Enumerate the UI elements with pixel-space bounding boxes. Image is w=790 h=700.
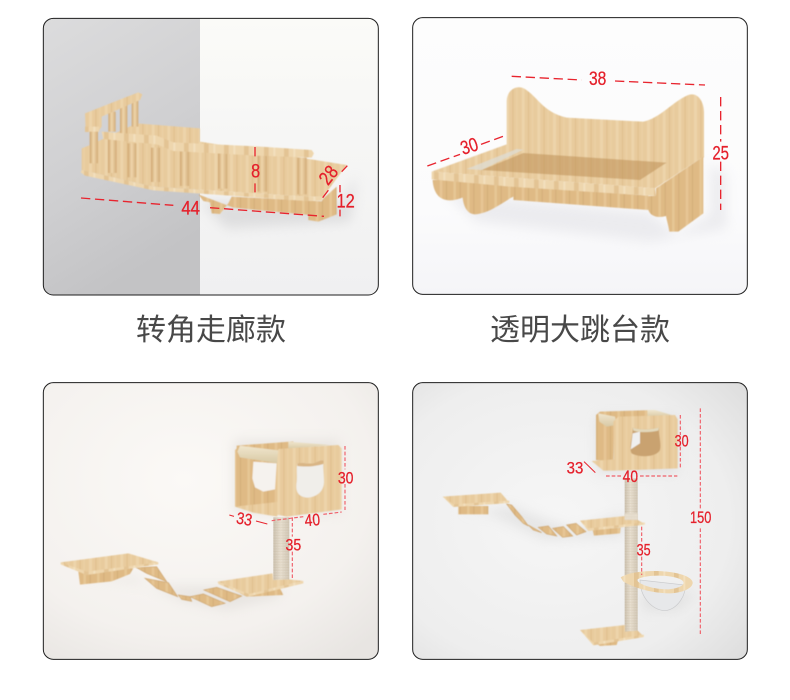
label 44: 44 [181, 198, 200, 219]
label 30: 30 [675, 431, 689, 450]
label 30: 30 [458, 134, 481, 160]
jump platform illustration [432, 87, 704, 232]
label 40: 40 [623, 467, 638, 486]
soft wall shadow [443, 162, 727, 242]
scratching post [273, 517, 289, 581]
wall background [43, 18, 378, 295]
label 33: 33 [235, 508, 254, 530]
dimension lines: cube house [229, 446, 345, 579]
scratching post [625, 478, 638, 632]
cube house [592, 410, 678, 471]
cube house [235, 441, 342, 517]
hammock with glass bowl [621, 571, 693, 611]
label 38: 38 [589, 69, 606, 90]
panel: tall tower with hammock [413, 383, 747, 659]
dimension lines: corner shelf [81, 147, 347, 216]
label 30: 30 [338, 469, 353, 488]
rope bridge [507, 504, 586, 537]
label 35: 35 [285, 535, 301, 554]
rope bridge [137, 567, 242, 607]
label 8: 8 [251, 161, 260, 182]
caption: transparent jump platform: 透明大跳台款 [490, 314, 670, 347]
dimension lines: tower [584, 408, 700, 635]
label 25: 25 [712, 144, 729, 165]
label 33: 33 [567, 459, 583, 478]
label 28: 28 [315, 162, 343, 189]
upper left platform [443, 493, 509, 514]
panel border [413, 383, 747, 659]
bottom platform [580, 625, 644, 646]
label 12: 12 [336, 192, 355, 213]
wall background [413, 383, 747, 659]
soft shadows [458, 417, 697, 610]
lower platform [218, 573, 303, 597]
wall background [43, 383, 378, 659]
corner shelf illustration [81, 92, 347, 222]
soft shadows [80, 440, 340, 610]
label 150: 150 [690, 508, 711, 527]
wall background [413, 18, 747, 294]
label 40: 40 [304, 510, 321, 530]
upper left platform [61, 553, 158, 585]
panel: corner walkway shelf [43, 18, 378, 295]
panel: transparent jump platform [413, 18, 747, 294]
panel border [413, 18, 747, 294]
panel border [43, 383, 378, 659]
panel: cube house with bridge [43, 383, 378, 659]
label 35: 35 [637, 540, 651, 559]
caption: corner walkway: 转角走廊款 [136, 314, 286, 347]
middle platform [580, 513, 645, 536]
panel border [43, 18, 378, 295]
dimension lines: jump platform [427, 76, 721, 210]
